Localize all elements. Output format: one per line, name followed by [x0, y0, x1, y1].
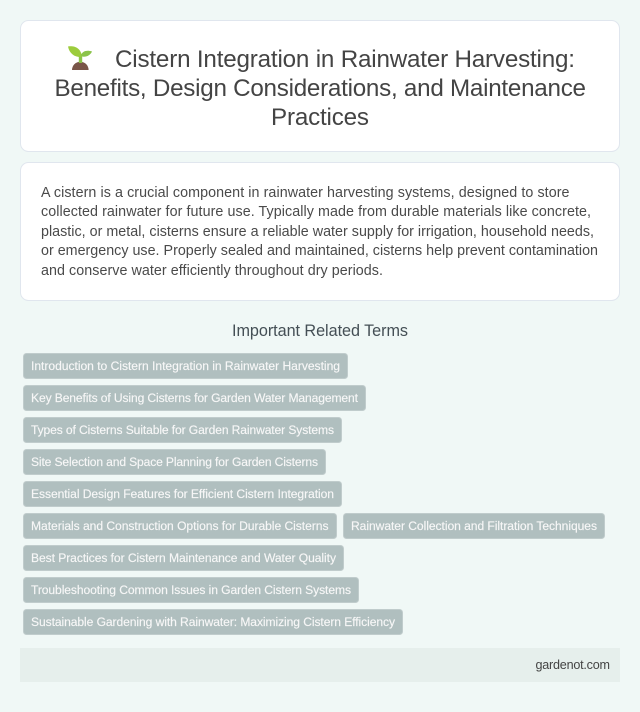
text block: description [41, 185, 598, 279]
tag: key benefits [24, 386, 366, 410]
text block: description: A cistern is a crucial component in rainwater harvesting systems, designed to store [41, 185, 570, 201]
tag: materials [24, 514, 336, 538]
title: Benefits, Design Considerations, and Maintenance [54, 75, 586, 102]
tag: site selection: Site Selection and Space Planning for Garden Cisterns [31, 455, 318, 469]
title: Cistern Integration in Rainwater Harvesting: [115, 46, 575, 73]
tag: troubleshooting [24, 578, 358, 602]
icon: seedling [68, 46, 92, 70]
text block: description: and conserve water efficiently throughout dry periods. [41, 263, 383, 279]
tag: troubleshooting: Troubleshooting Common Issues in Garden Cistern Systems [31, 583, 351, 597]
tag: sustainable gardening [24, 610, 402, 634]
tag: key benefits: Key Benefits of Using Cisterns for Garden Water Management [31, 391, 359, 405]
text block: description: plastic, or metal, cisterns ensure a reliable water supply for irrigation, household needs, [41, 224, 594, 240]
tag list [24, 354, 604, 634]
heading: related terms: Important Related Terms [232, 322, 408, 340]
title [54, 46, 586, 131]
tag: introduction [24, 354, 348, 378]
panel: title card [20, 20, 620, 152]
tag: collection and filtration: Rainwater Collection and Filtration Techniques [351, 519, 597, 533]
tag: site selection [24, 450, 326, 474]
footer source: gardenot.com [536, 658, 610, 672]
title: Practices [271, 104, 369, 131]
tag: introduction: Introduction to Cistern Integration in Rainwater Harvesting [31, 359, 340, 373]
tag: materials: Materials and Construction Options for Durable Cisterns [31, 519, 328, 533]
text block: description: or emergency use. Properly sealed and maintained, cisterns help prevent contamination [41, 243, 598, 259]
tag: design features: Essential Design Features for Efficient Cistern Integration [31, 487, 334, 501]
tag: collection and filtration [344, 514, 604, 538]
tag: maintenance: Best Practices for Cistern Maintenance and Water Quality [31, 551, 337, 565]
tag: types: Types of Cisterns Suitable for Garden Rainwater Systems [31, 423, 334, 437]
tag: types [24, 418, 342, 442]
tag: maintenance [24, 546, 344, 570]
footer [20, 648, 620, 682]
text block: description: collected rainwater for future use. Typically made from durable materials like concrete, [41, 204, 591, 220]
tag: design features [24, 482, 342, 506]
panel: description card [20, 162, 620, 300]
tag: sustainable gardening: Sustainable Gardening with Rainwater: Maximizing Cistern Efficiency [31, 615, 396, 629]
